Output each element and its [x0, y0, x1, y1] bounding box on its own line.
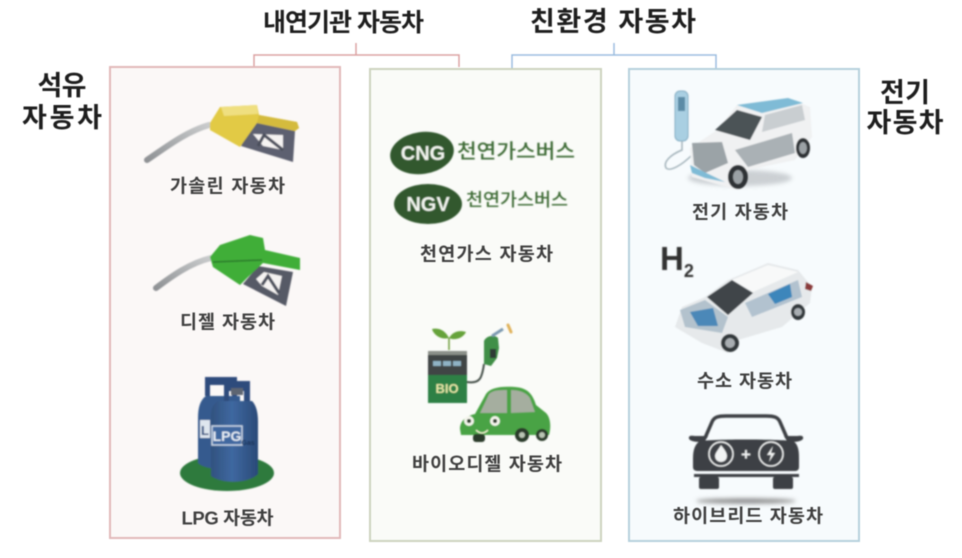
- bracket: internal combustion: [254, 43, 459, 67]
- heading: electric vehicles: 전기: [880, 78, 930, 108]
- icon: CNG bus logo: [387, 128, 575, 178]
- panel: eco-friendly vehicles: [370, 69, 601, 541]
- icon: hybrid car: +: [741, 445, 751, 464]
- label: hydrogen vehicle: 수소 자동차: [697, 370, 792, 392]
- label: LPG vehicle: LPG 자동차: [182, 508, 274, 528]
- heading: petroleum vehicles: [22, 71, 102, 133]
- icon: H2 symbol: H: [660, 240, 684, 277]
- icon: electric car with charger: [665, 91, 812, 190]
- icon: hydrogen car: [675, 263, 813, 353]
- label: diesel vehicle: 디젤 자동차: [180, 312, 275, 332]
- icon: H2 symbol: 2: [684, 261, 694, 281]
- icon: bio fuel pump and green car: [428, 325, 550, 442]
- icon: LPG cylinders: L: [201, 423, 209, 438]
- bracket: eco-friendly: [512, 43, 716, 69]
- label: electric vehicle: 전기 자동차: [692, 202, 788, 222]
- icon: yellow gasoline nozzle: [147, 105, 299, 162]
- icon: NGV bus logo: NGV: [406, 194, 450, 216]
- label: biodiesel vehicle: 바이오디젤 자동차: [412, 454, 562, 474]
- icon: NGV bus logo: [394, 184, 568, 224]
- heading: petroleum vehicles: 석유: [38, 71, 86, 101]
- heading: petroleum vehicles: 자동차: [22, 103, 102, 133]
- label: hybrid vehicle: 하이브리드 자동차: [673, 506, 823, 526]
- icon: H2 symbol: [660, 240, 694, 281]
- icon: bio fuel pump and green car: BIO: [435, 381, 459, 396]
- icon: green diesel nozzle: [156, 235, 300, 306]
- heading: electric vehicles: 자동차: [866, 108, 944, 138]
- panel: electric vehicles: [629, 69, 859, 541]
- icon: LPG cylinders: [180, 377, 274, 491]
- icon: LPG cylinders: LPG: [213, 428, 241, 444]
- heading: eco-friendly vehicles: 친환경 자동차: [530, 7, 696, 37]
- panel: petroleum vehicles: [110, 67, 340, 538]
- icon: CNG bus logo: CNG: [401, 143, 445, 165]
- heading: internal combustion vehicles: 내연기관 자동차: [263, 9, 424, 37]
- heading: electric vehicles: [866, 78, 944, 138]
- icon: NGV bus logo: 천연가스버스: [466, 190, 568, 210]
- icon: hybrid car: [689, 416, 803, 504]
- label: gasoline vehicle: 가솔린 자동차: [170, 176, 285, 196]
- icon: LPG cylinders: Gas: [241, 440, 255, 447]
- icon: CNG bus logo: 천연가스버스: [457, 140, 575, 163]
- label: natural gas vehicle: 천연가스 자동차: [420, 244, 553, 264]
